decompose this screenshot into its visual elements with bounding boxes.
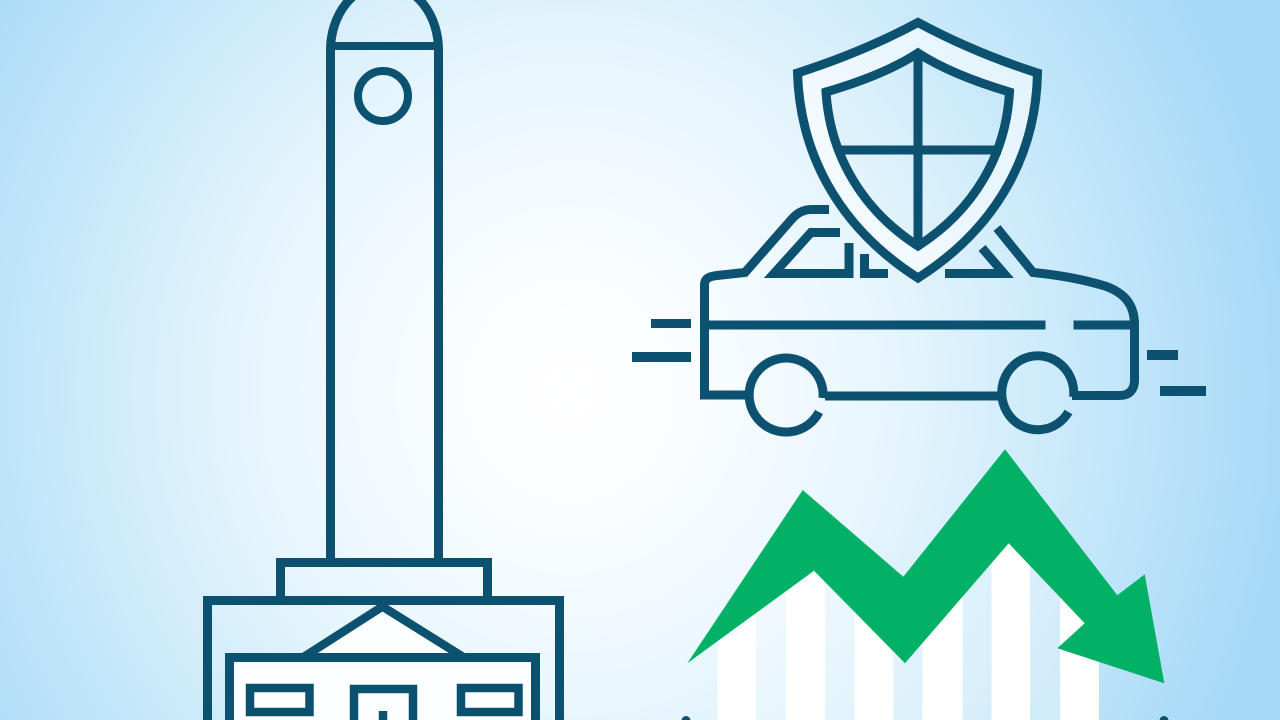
motion line upper left xyxy=(651,319,691,328)
icon: car with motion lines xyxy=(632,210,1206,432)
motion line lower right xyxy=(1160,386,1206,396)
shield pale band xyxy=(798,22,1038,278)
car sill xyxy=(825,392,999,400)
motion line lower left xyxy=(632,352,691,362)
right window xyxy=(461,688,518,712)
motion line upper right xyxy=(1147,350,1178,360)
building outer wall xyxy=(208,600,560,720)
shield cross xyxy=(836,53,1001,246)
car front wheel xyxy=(749,358,823,432)
pale bar gaps xyxy=(756,556,1060,720)
car body xyxy=(704,210,829,395)
car body rear xyxy=(997,228,1134,396)
car belt line xyxy=(704,320,1134,330)
axis marker left xyxy=(682,716,690,720)
door xyxy=(354,689,413,720)
shield outer outline xyxy=(798,22,1038,278)
building front xyxy=(230,658,536,720)
monument column xyxy=(330,0,438,562)
building roof gable xyxy=(299,606,468,660)
shield inner outline xyxy=(826,53,1010,246)
axis marker right xyxy=(1160,716,1168,720)
car rear wheel xyxy=(1002,356,1074,430)
white bars xyxy=(718,535,1099,720)
car windows xyxy=(774,232,1004,274)
monument plinth xyxy=(280,562,488,600)
chart: falling market xyxy=(682,449,1168,720)
icon: monument and government building xyxy=(208,0,560,720)
left window xyxy=(250,688,310,712)
green zigzag arrow xyxy=(687,449,1164,683)
icon: shield xyxy=(798,22,1038,278)
